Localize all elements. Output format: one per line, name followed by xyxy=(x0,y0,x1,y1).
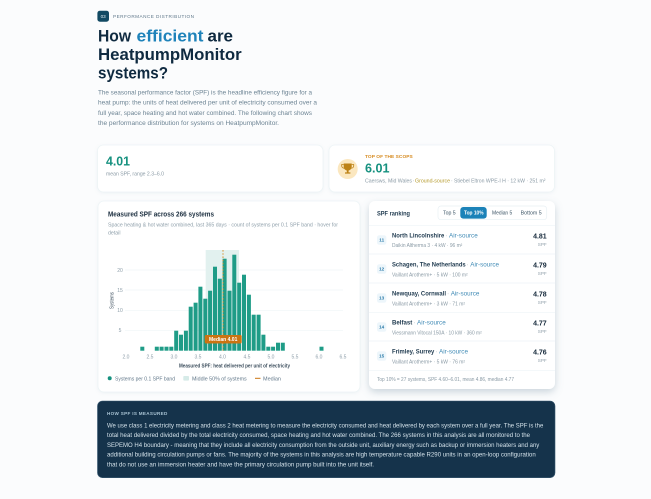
rank row 11 xyxy=(377,232,547,249)
stat card: top of the scops: · xyxy=(413,178,415,184)
x axis labels: Measured SPF: heat delivered per unit of electricity xyxy=(179,364,290,370)
x axis labels: 2.0 xyxy=(123,354,130,360)
histogram bars xyxy=(140,255,324,351)
rank row 13 xyxy=(377,290,547,307)
title: efficient xyxy=(136,27,204,46)
explanation text: We use class 1 electricity metering and class 2 heat metering to measure the electricity consumed and heat delivered by each system over a full year. The SPF is the xyxy=(107,422,544,430)
chart heading: Measured SPF across 266 systems xyxy=(108,209,214,218)
rank row 14 xyxy=(377,319,547,336)
ranking tabs: Median 5 xyxy=(492,211,513,217)
rank row 12: SPF xyxy=(538,271,547,276)
legend xyxy=(108,376,281,382)
x axis labels: 5.5 xyxy=(292,354,299,360)
x axis labels: 6.5 xyxy=(340,354,347,360)
explanation text: that do not use an immersion heater and have the primary circulation pump built into the unit itself. xyxy=(107,461,374,468)
rank row 12: 4.79 xyxy=(533,262,547,269)
rank row 12 xyxy=(377,261,547,278)
rank row 11: Air-source xyxy=(449,232,478,239)
stat card: top of the scops xyxy=(329,145,554,192)
section tag: PERFORMANCE DISTRIBUTION xyxy=(113,14,194,19)
legend: Middle 50% of systems xyxy=(192,376,247,382)
ranking tabs: Bottom 5 xyxy=(521,211,542,217)
panel: SPF ranking xyxy=(369,201,555,389)
rank row 11: Daikin Altherma 3 · 4 kW · 96 m² xyxy=(392,243,463,249)
title xyxy=(98,27,242,82)
rank row 14: SPF xyxy=(538,329,547,334)
median label xyxy=(205,335,242,344)
rank row 13: Newquay, Cornwall xyxy=(392,290,446,297)
rank row 14: 14 xyxy=(379,325,385,330)
y axis labels: 20 xyxy=(117,268,123,274)
y axis labels: 15 xyxy=(117,288,123,294)
rank row 12: Vaillant Arotherm+ · 5 kW · 100 m² xyxy=(392,272,468,278)
title: systems? xyxy=(98,64,168,82)
explanation text: total heat delivered divided by the total electricity consumed, space heating and hot water combined. The 266 systems in this analysis are all monitored to the xyxy=(107,432,530,439)
x axis labels: 4.5 xyxy=(244,354,251,360)
stat card: top of the scops: Caersws, Mid Wales xyxy=(365,178,412,184)
intro paragraph: the performance distribution for systems on HeatpumpMonitor. xyxy=(98,120,279,127)
intro paragraph: The seasonal performance factor (SPF) is the headline efficiency figure for a xyxy=(98,89,312,96)
rank row 11: 11 xyxy=(379,238,385,243)
chart heading xyxy=(108,209,338,236)
y axis labels: 10 xyxy=(117,308,123,314)
intro paragraph: full year, space heating and hot water combined. The following chart shows xyxy=(98,110,313,117)
x axis labels: 6.0 xyxy=(316,354,323,360)
ranking tabs xyxy=(438,206,547,220)
stat card: top of the scops: Ground-source xyxy=(415,178,450,184)
section tag xyxy=(97,11,194,22)
stat card: top of the scops: Stiebel Eltron WPE-I H · 12 kW · 251 m² xyxy=(454,178,546,184)
rank row 13: 13 xyxy=(379,296,385,301)
x axis labels: 5.0 xyxy=(268,354,275,360)
y axis labels: Systems xyxy=(109,292,115,309)
rank row 15: Vaillant Arotherm+ · 5 kW · 76 m² xyxy=(392,359,465,365)
rank row 15: SPF xyxy=(538,358,547,363)
panel: how SPF is measured: HOW SPF IS MEASURED xyxy=(107,411,168,416)
x axis labels: 3.5 xyxy=(195,354,202,360)
stat card: mean SPF: mean SPF, range 2.3–6.0 xyxy=(106,171,164,177)
legend: Median xyxy=(263,376,281,382)
stat card: top of the scops: TOP OF THE SCOPS xyxy=(365,154,413,160)
y axis labels xyxy=(109,268,123,334)
stat card: mean SPF xyxy=(98,145,323,192)
rank row 11: SPF xyxy=(538,242,547,247)
rank row 13: Vaillant Arotherm+ · 3 kW · 71 m² xyxy=(392,301,465,307)
rank row 11: 4.81 xyxy=(533,233,547,240)
intro paragraph xyxy=(98,89,317,127)
median label: Median 4.01 xyxy=(209,337,238,343)
title: HeatpumpMonitor xyxy=(98,45,242,64)
rank row 13: Air-source xyxy=(451,290,480,297)
rank row 13: 4.78 xyxy=(533,291,547,298)
rank row 12: 12 xyxy=(379,267,385,272)
stat card: top of the scops: 6.01 xyxy=(365,160,390,175)
icon: trophy xyxy=(338,159,358,179)
rank row 11: North Lincolnshire xyxy=(392,232,445,239)
ranking summary: Top 10% = 27 systems, SPF 4.60–6.01, mean 4.86, median 4.77 xyxy=(377,377,514,383)
rank row 14: · xyxy=(414,320,416,326)
rank row 15: · xyxy=(436,349,438,355)
chart heading: Space heating & hot water combined, last 365 days · count of systems per 0.1 SPF band · hover for xyxy=(108,222,338,228)
rank row 13: SPF xyxy=(538,300,547,305)
panel: SPF histogram xyxy=(98,201,360,392)
title: How xyxy=(98,27,132,46)
explanation text: additional building circulation pumps or fans. The majority of the systems in this analysis are high temperature capable R290 units in an open-loop configuration xyxy=(107,452,536,459)
median line xyxy=(222,250,224,351)
rank row 11: · xyxy=(445,233,447,239)
rank row 13: · xyxy=(447,291,449,297)
chart heading: detail xyxy=(108,230,120,236)
explanation text xyxy=(107,422,544,468)
ranking tabs: Top 10% xyxy=(464,211,484,217)
middle 50 percent band xyxy=(206,250,239,351)
x axis labels: 4.0 xyxy=(219,354,226,360)
legend: Systems per 0.1 SPF band xyxy=(115,376,175,382)
panel: how SPF is measured xyxy=(98,401,555,478)
rank row 12: Schagen, The Netherlands xyxy=(392,261,466,268)
rank row 15: 15 xyxy=(379,354,385,359)
rank row 15 xyxy=(377,348,547,365)
x axis labels: 3.0 xyxy=(171,354,178,360)
rank row 15: 4.76 xyxy=(533,349,547,356)
title: are xyxy=(208,27,233,46)
rank row 14: 4.77 xyxy=(533,320,547,327)
stat card: mean SPF: 4.01 xyxy=(106,154,130,169)
rank row 14: Belfast xyxy=(392,319,413,326)
stat card: top of the scops: · xyxy=(451,178,453,184)
explanation text: SEPEMO H4 boundary - meaning that they include all electricity consumption from the outside unit, auxiliary energy such as backup or immersion heaters and any xyxy=(107,442,540,449)
gridlines xyxy=(125,270,343,330)
intro paragraph: heat pump: the units of heat delivered per unit of electricity consumed over a xyxy=(98,100,317,107)
section tag: 03 xyxy=(101,14,106,19)
y axis labels: 5 xyxy=(119,328,122,334)
rank row 14: Air-source xyxy=(417,319,446,326)
x axis labels xyxy=(123,354,347,370)
rank row 12: · xyxy=(467,262,469,268)
rank row 12: Air-source xyxy=(470,261,499,268)
rank row 15: Frimley, Surrey xyxy=(392,348,435,355)
rank row 15: Air-source xyxy=(439,348,468,355)
rank row 14: Viessmann Vitocal 150A · 10 kW · 360 m² xyxy=(392,330,482,336)
x axis labels: 2.5 xyxy=(147,354,154,360)
ranking tabs: Top 5 xyxy=(443,211,456,217)
ranking heading: SPF ranking xyxy=(377,210,410,217)
